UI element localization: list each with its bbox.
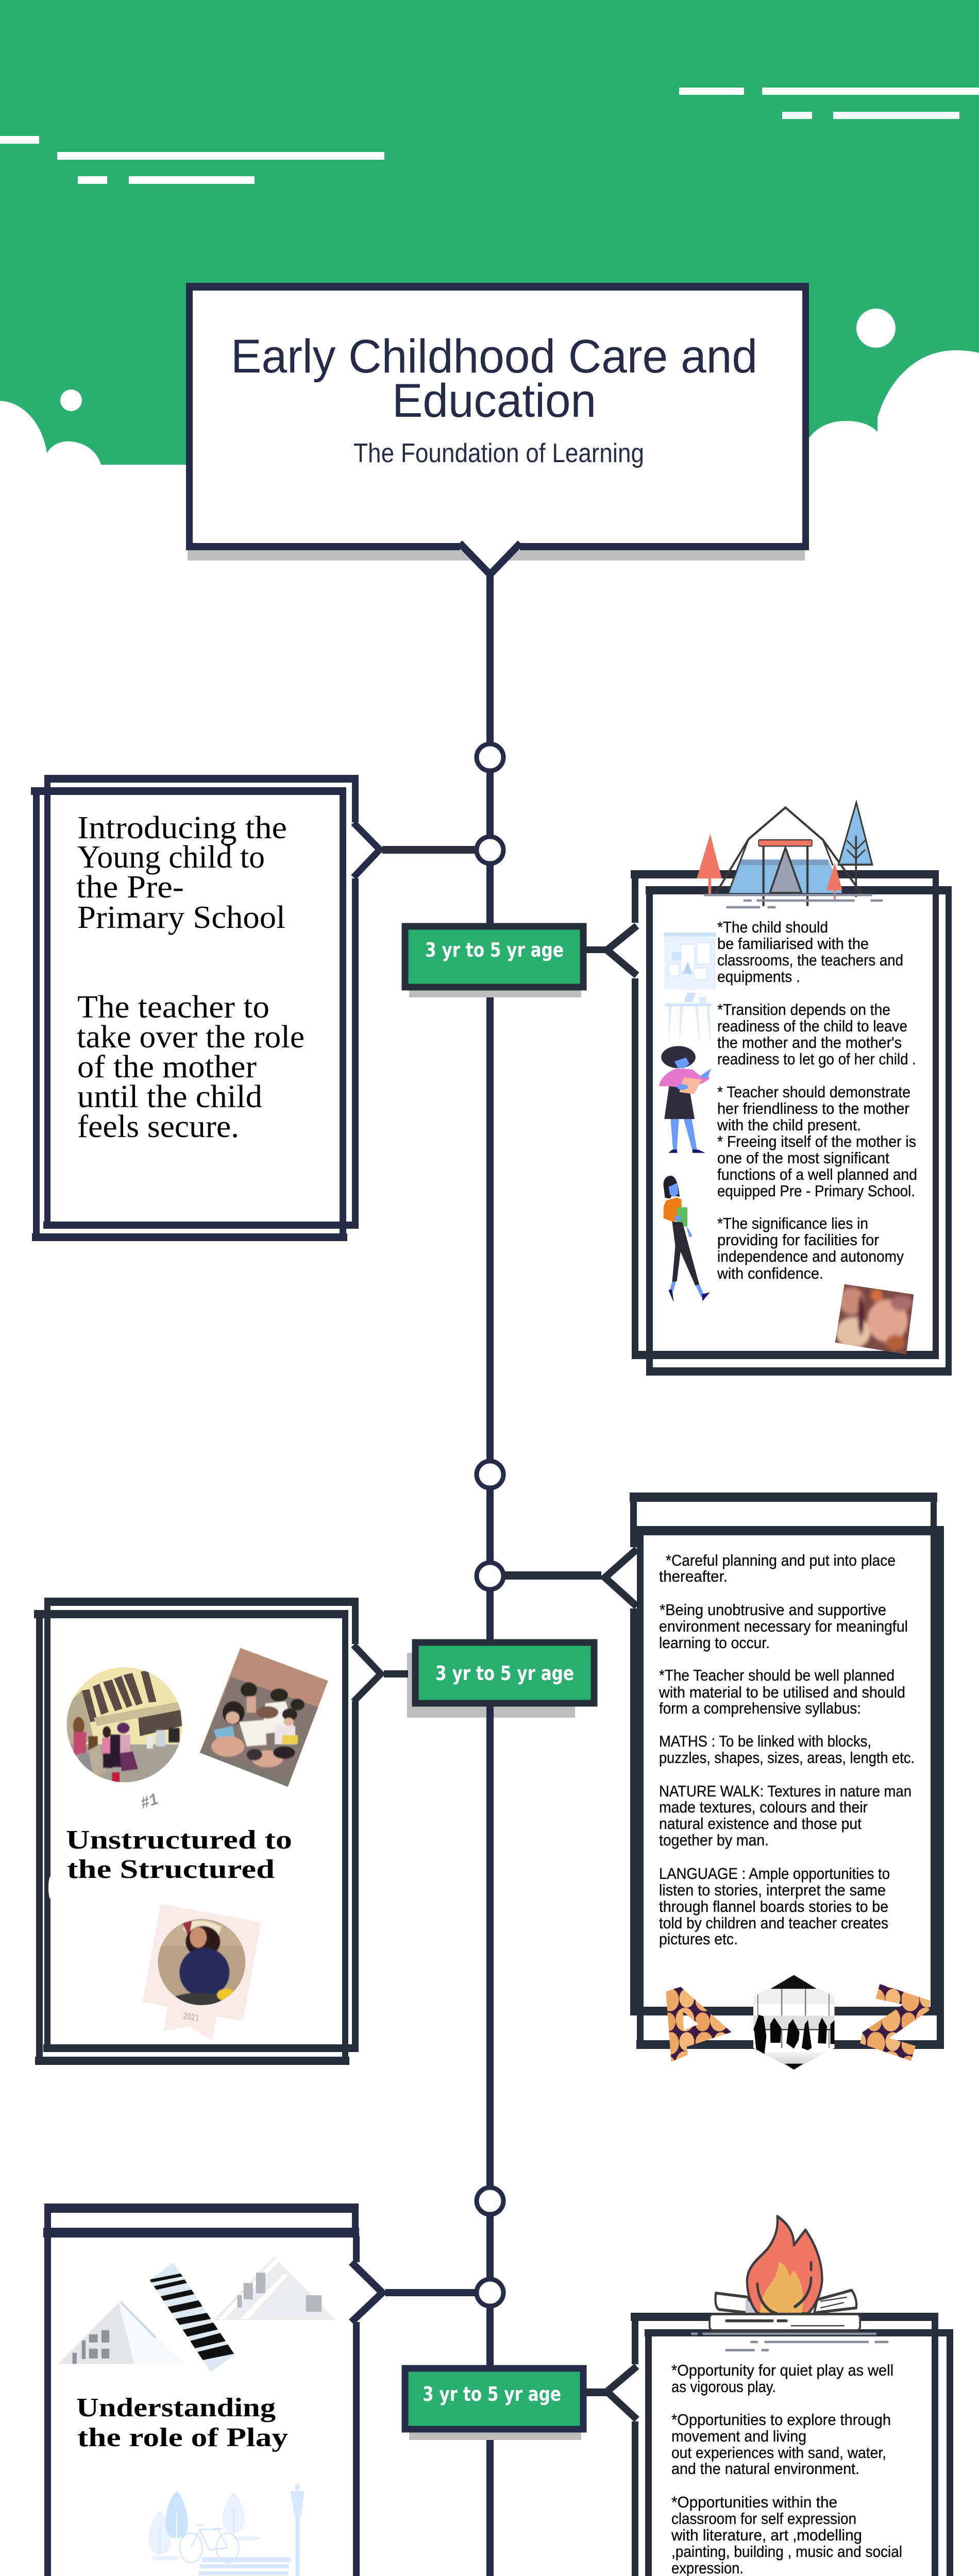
panel: understanding the role of play — [43, 2204, 477, 2576]
panel text: learning to occur. — [659, 1634, 770, 1652]
photo: girls in front of building — [65, 1666, 184, 1786]
panel text: * Teacher should demonstrate — [717, 1083, 910, 1101]
panel text: MATHS : To be linked with blocks, — [659, 1732, 871, 1750]
panel text: the mother and the mother's — [717, 1033, 902, 1052]
photo: family sitting on steps — [197, 1646, 331, 1790]
panel text: her friendliness to the mother — [717, 1099, 909, 1117]
panel text: until the child — [77, 1079, 262, 1114]
panel: introducing the young child — [31, 775, 478, 1241]
panel text: pictures etc. — [659, 1930, 738, 1948]
panel text: listen to stories, interpret the same — [659, 1881, 886, 1899]
panel text: equipped Pre - Primary School. — [717, 1182, 915, 1200]
panel text: functions of a well planned and — [717, 1165, 917, 1183]
panel text: *Careful planning and put into place — [666, 1551, 896, 1569]
panel text: and the natural environment. — [671, 2460, 859, 2478]
panel text: readiness of the child to leave — [717, 1017, 907, 1035]
panel text: together by man. — [659, 1831, 769, 1849]
panel heading: the role of Play — [77, 2423, 288, 2452]
panel text: The teacher to — [77, 990, 269, 1025]
panel text: take over the role — [77, 1020, 305, 1055]
panel text: form a comprehensive syllabus: — [659, 1699, 861, 1717]
panel text: *Being unobtrusive and supportive — [660, 1601, 886, 1619]
title text second line: Education — [392, 375, 596, 427]
icon: wood-textured letter A — [666, 1987, 732, 2062]
panel text: the Pre- — [76, 870, 184, 905]
panel text: classrooms, the teachers and — [717, 951, 903, 969]
panel text: one of the most significant — [717, 1149, 889, 1167]
panel text: *Opportunities to explore through — [671, 2411, 891, 2429]
panel: unstructured to the structured — [34, 1598, 408, 2065]
panel text: * Freeing itself of the mother is — [717, 1132, 916, 1150]
image: striped building strip — [149, 2263, 235, 2372]
panel text: readiness to let go of her child . — [717, 1050, 916, 1068]
panel 2 badge shadow behind timeline — [407, 1653, 575, 1718]
panel text: *Opportunities within the — [671, 2493, 837, 2511]
badge 1: age range: 3 yr to 5 yr age — [425, 939, 564, 961]
year label: 2021 — [182, 2011, 200, 2023]
panel text: Primary School — [77, 900, 285, 935]
panel text: natural existence and those put — [659, 1815, 862, 1833]
panel heading — [66, 1825, 292, 1884]
icon: campfire — [691, 2216, 888, 2351]
panel text: with the child present. — [717, 1116, 861, 1134]
panel text: Introducing the — [77, 810, 287, 845]
panel text: *Transition depends on the — [717, 1001, 890, 1019]
photo: meeting silhouettes in hexagon — [752, 1975, 836, 2072]
badge 3: age range: 3 yr to 5 yr age — [423, 2383, 561, 2405]
panel text: out experiences with sand, water, — [671, 2444, 886, 2462]
panel text — [76, 810, 305, 1144]
image: white building left — [58, 2302, 184, 2364]
panel text — [659, 1551, 915, 1948]
timeline nodes — [476, 744, 503, 2576]
panel text: providing for facilities for — [717, 1231, 879, 1249]
panel text — [671, 2361, 902, 2576]
badge 1: age range — [405, 926, 583, 997]
photo: baby hands — [835, 1284, 914, 1354]
panel heading: Understanding — [76, 2393, 276, 2422]
panel text: as vigorous play. — [671, 2378, 776, 2396]
icon: wood-textured letter Z — [860, 1984, 931, 2061]
panel text: thereafter. — [659, 1567, 728, 1585]
image: white building right — [214, 2256, 335, 2320]
panel text: be familiarised with the — [717, 935, 869, 953]
label: #1: #1 — [139, 1789, 160, 1814]
panel text: through flannel boards stories to be — [659, 1897, 888, 1916]
title text: Early Childhood Care and — [231, 330, 757, 383]
panel text: *The significance lies in — [717, 1214, 868, 1232]
ribbon photo badge — [142, 1904, 261, 2040]
panel text — [717, 918, 917, 1282]
badge 2: age range: 3 yr to 5 yr age — [435, 1662, 574, 1685]
panel heading: the Structured — [67, 1855, 275, 1884]
panel: opportunities for play text panel — [586, 2313, 953, 2576]
badge 2: age range — [415, 1642, 594, 1703]
panel heading: Unstructured to — [66, 1825, 292, 1855]
panel text: movement and living — [671, 2427, 806, 2445]
panel text: feels secure. — [77, 1109, 239, 1144]
panel text: puzzles, shapes, sizes, areas, length etc. — [659, 1749, 915, 1767]
panel text: with confidence. — [717, 1264, 823, 1282]
panel text: of the mother — [77, 1049, 257, 1084]
panel text: independence and autonomy — [717, 1247, 904, 1265]
panel text: told by children and teacher creates — [659, 1914, 888, 1932]
panel text: LANGUAGE : Ample opportunities to — [659, 1865, 890, 1883]
panel text: NATURE WALK: Textures in nature man — [659, 1782, 912, 1800]
icon: woman with clipboard — [659, 1046, 711, 1153]
icon: walking woman with tablet — [663, 1176, 710, 1302]
panel text: with literature, art ,modelling — [671, 2526, 862, 2544]
image: park bench, bicycle, trees and lamp — [148, 2484, 305, 2576]
panel text: *The child should — [717, 918, 828, 936]
panel text: with material to be utilised and should — [659, 1683, 905, 1701]
panel text: *The Teacher should be well planned — [659, 1666, 894, 1684]
panel text: classroom for self expression — [671, 2510, 856, 2528]
panel: careful planning text panel — [502, 1493, 944, 2049]
panel text: made textures, colours and their — [659, 1798, 868, 1816]
title card — [186, 283, 809, 574]
panel text: *Opportunity for quiet play as well — [671, 2361, 893, 2379]
panel text: equipments . — [717, 968, 800, 986]
panel heading — [76, 2393, 288, 2452]
icon: camping tent and trees — [697, 802, 883, 908]
icon: pale dashboard screen on desk — [664, 933, 716, 1046]
panel text: ,painting, building , music and social — [671, 2543, 902, 2561]
timeline spine — [486, 571, 494, 2576]
panel text: environment necessary for meaningful — [659, 1617, 908, 1635]
header background with clouds — [0, 0, 979, 465]
subtitle: The Foundation of Learning — [353, 438, 644, 468]
badge 3: age range — [405, 2368, 583, 2440]
panel: transition text panel — [586, 870, 952, 1376]
panel text: Young child to — [77, 840, 265, 875]
